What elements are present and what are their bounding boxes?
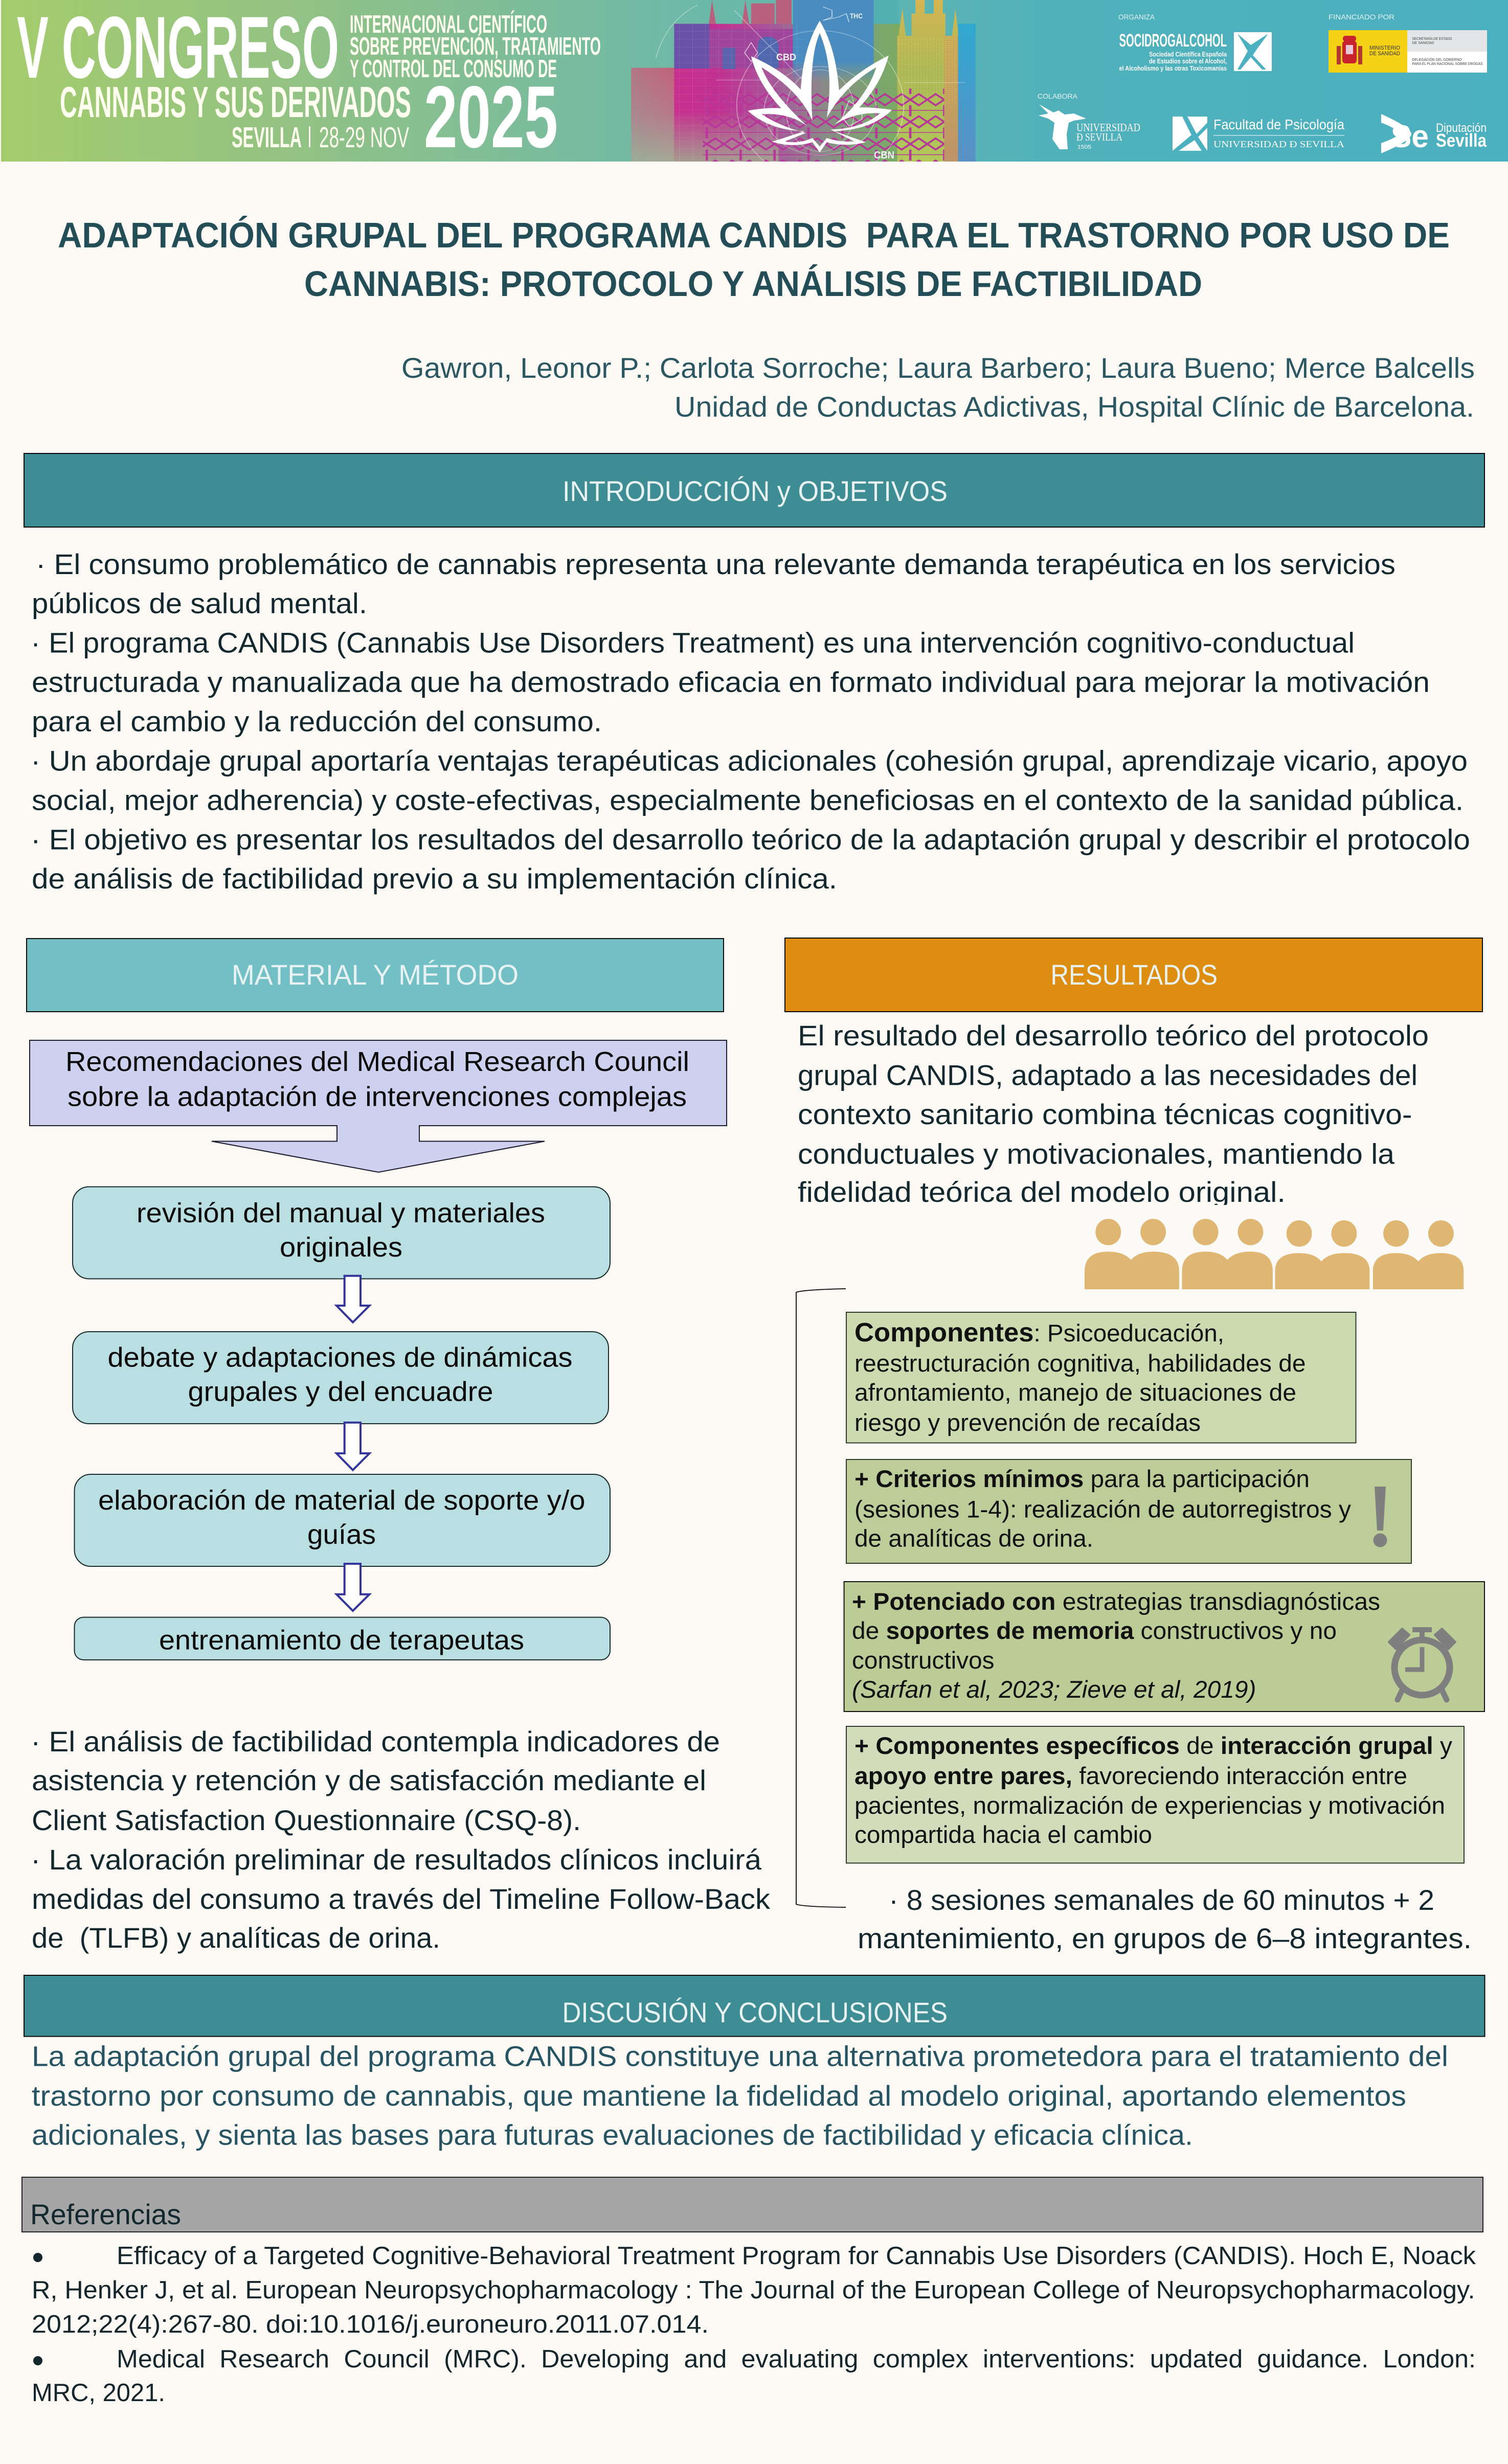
icon: group of people [1082,1205,1468,1292]
text block: resultado: grupal CANDIS, adaptado a las necesidades del [798,1059,1417,1091]
text block: introducción: para el cambio y la reducción del consumo. [32,705,602,737]
text block: factibilidad: asistencia y retención y de satisfacción mediante el [32,1764,706,1796]
text block: resultado: contexto sanitario combina técnicas cognitivo- [798,1098,1412,1130]
title: CANNABIS: PROTOCOLO Y ANÁLISIS DE FACTIBILIDAD [304,264,1202,304]
flowchart step: revisión [73,1187,610,1279]
logo: Diputación de Sevilla: Diputación [1436,121,1487,135]
box: componentes: afrontamiento, manejo de situaciones de [854,1379,1296,1406]
panel: discusión y conclusiones [24,1975,1485,2151]
text block: introducción: · El programa CANDIS (Cannabis Use Disorders Treatment) es una intervención cognitivo-conductual [31,627,1355,658]
heading: material y método [27,939,724,1012]
logo: Ministerio de Sanidad: SECRETARÍA DE ESTADO [1412,36,1452,41]
text block: references [32,2242,1476,2407]
text block: introducción [31,548,1470,895]
box: componentes [846,1312,1356,1443]
box: criterios mínimos: (sesiones 1-4): realización de autorregistros y [854,1496,1351,1522]
banner title text [17,0,601,166]
flowchart box: MRC recommendations [30,1040,727,1172]
logo: Universidad de Sevilla: 1505 [1077,144,1091,150]
heading: resultados: RESULTADOS [1050,959,1218,991]
heading: discusión: DISCUSIÓN Y CONCLUSIONES [562,1996,948,2028]
flowchart step: elaboración: elaboración de material de soporte y/o [98,1485,585,1516]
text block: introducción: · El consumo problemático de cannabis representa una relevante demanda terapéutica en los servicios [36,548,1396,580]
title [58,215,1450,304]
text block: factibilidad: Client Satisfaction Questionnaire (CSQ-8). [32,1804,581,1836]
text block: factibilidad: · El análisis de factibilidad contempla indicadores de [31,1725,720,1758]
box: potenciado con: constructivos [852,1647,994,1674]
banner title text: INTERNACIONAL CIENTÍFICO [350,11,547,38]
heading: introducción [24,453,1484,527]
logo: Universidad de Sevilla: COLABORA [1038,92,1078,100]
authors and affiliation [401,352,1475,423]
banner title text: SOBRE PREVENCIÓN, TRATAMIENTO [350,32,601,60]
box: componentes: riesgo y prevención de recaídas [854,1409,1201,1436]
logo: Socidrogalcohol: ORGANIZA [1118,13,1155,21]
heading: referencias [22,2177,1483,2232]
bracket [796,1289,846,1907]
flowchart step: elaboración [75,1474,610,1566]
box: criterios mínimos: de analíticas de orina. [854,1524,1093,1552]
logo: Ministerio de Sanidad: DE SANIDAD [1412,41,1434,45]
panel: material y método [27,939,771,1954]
text block: introducción: de análisis de factibilidad previo a su implementación clínica. [32,862,837,895]
heading: material y método: MATERIAL Y MÉTODO [232,959,519,991]
text block: resultado: conductuales y motivacionales, mantiendo la [798,1138,1395,1170]
box: componentes específicos: + Componentes específicos de interacción grupal y [854,1732,1453,1759]
banner title text: 2025 [424,68,558,166]
heading: resultados [785,938,1482,1012]
text block: sesiones [858,1884,1472,1954]
logo: Facultad de Psicología: Facultad de Psicología [1213,117,1344,132]
text block: references: Medical Research Council (MRC). Developing and evaluating complex interventions: updated guidance. London: [117,2345,1476,2373]
text block: introducción: estructurada y manualizada que ha demostrado eficacia en formato individual para mejorar la motivación [32,666,1430,698]
text block: references: MRC, 2021. [32,2379,165,2407]
logo: Facultad de Psicología [1173,117,1344,151]
text block: introducción: · El objetivo es presentar los resultados del desarrollo teórico de la adaptación grupal y describir el protocolo [31,823,1470,855]
logo: Socidrogalcohol: el Alcoholismo y las otras Toxicomanías [1119,64,1227,72]
flowchart step: elaboración: guías [307,1519,376,1550]
banner labels: molecules: CBN [874,150,894,161]
text block: references: Efficacy of a Targeted Cognitive-Behavioral Treatment Program for Cannabis Use Disorders (CANDIS). Hoch E, Noack [117,2242,1476,2270]
banner title text: CANNABIS Y SUS DERIVADOS [60,78,411,127]
arrow: step 1 to 2 [336,1276,369,1322]
flowchart step: entrenamiento [75,1617,610,1660]
banner labels: molecules: CBD [776,52,796,62]
box: componentes específicos: apoyo entre pares, favoreciendo interacción entre [854,1762,1407,1789]
panel: introducción y objetivos [24,453,1484,895]
text block: references: R, Henker J, et al. European Neuropsychopharmacology : The Journal of the European College of Neuropsychopharmacology. [32,2276,1475,2304]
logo: Universidad de Sevilla: Ð SEVILLA [1076,131,1123,143]
banner title text: 28-29 NOV [319,121,409,154]
text block: factibilidad: medidas del consumo a través del Timeline Follow-Back [32,1883,771,1915]
text block: conclusiones [32,2040,1448,2151]
text block: introducción: públicos de salud mental. [32,587,367,620]
arrow: step 3 to 4 [336,1564,369,1611]
box: potenciado con: de soportes de memoria constructivos y no [852,1617,1337,1644]
box: componentes específicos [846,1726,1464,1863]
icon: alarm clock [1389,1629,1455,1700]
text block: factibilidad: · La valoración preliminar de resultados clínicos incluirá [31,1843,762,1876]
logo: Ministerio de Sanidad: DELEGACIÓN DEL GOBIERNO [1412,57,1462,62]
panel: resultados [785,938,1484,1954]
logo: Facultad de Psicología: UNIVERSIDAD Ð SEVILLA [1213,139,1344,149]
logo: Socidrogalcohol [1118,13,1272,72]
flowchart step: debate: debate y adaptaciones de dinámicas [107,1342,573,1373]
banner illustration: Seville skyline with cannabis leaf [631,0,976,180]
box: potenciado con [844,1582,1484,1712]
logo: Diputación de Sevilla [1381,114,1487,154]
authors and affiliation: Unidad de Conductas Adictivas, Hospital Clínic de Barcelona. [674,391,1474,423]
flowchart step: debate [73,1332,609,1424]
logo: Ministerio de Sanidad: PARA EL PLAN NACIONAL SOBRE DROGAS [1412,62,1483,66]
icon: exclamation [1374,1487,1387,1547]
banner: congress header [1,0,1508,180]
text block: resultado: fidelidad teórica del modelo original. [798,1176,1286,1208]
box: componentes específicos: pacientes, normalización de experiencias y motivación [854,1792,1445,1819]
logo: Ministerio de Sanidad: MINISTERIO [1369,45,1400,51]
text block: conclusiones: adicionales, y sienta las bases para futuras evaluaciones de factibilidad y eficacia clínica. [32,2118,1193,2151]
banner labels: molecules [776,12,894,161]
logo: Socidrogalcohol: SOCIDROGALCOHOL [1119,31,1227,51]
banner title text: SEVILLA [232,121,302,154]
text block: sesiones: · 8 sesiones semanales de 60 minutos + 2 [889,1884,1434,1916]
logo: Ministerio de Sanidad: FINANCIADO POR [1329,13,1394,21]
flowchart box: MRC recommendations: sobre la adaptación de intervenciones complejas [67,1082,687,1112]
text block: introducción: · Un abordaje grupal aportaría ventajas terapéuticas adicionales (cohesión grupal, aprendizaje vicario, apoyo [31,744,1468,777]
text block: resultado [798,1019,1429,1208]
authors and affiliation: Gawron, Leonor P.; Carlota Sorroche; Laura Barbero; Laura Bueno; Merce Balcells [401,352,1475,384]
flowchart step: revisión: originales [280,1232,402,1263]
banner labels: molecules: THC [850,12,863,20]
text block: references: 2012;22(4):267-80. doi:10.1016/j.euroneuro.2011.07.014. [32,2311,709,2338]
panel: referencias [22,2177,1483,2407]
box: componentes: Componentes: Psicoeducación, [854,1318,1224,1348]
heading: introducción: INTRODUCCIÓN y OBJETIVOS [562,475,948,507]
banner title text: V CONGRESO [17,0,339,97]
text block: factibilidad: de (TLFB) y analíticas de orina. [32,1922,440,1954]
text block: conclusiones: trastorno por consumo de cannabis, que mantiene la fidelidad al modelo original, aportando elementos [32,2080,1406,2112]
flowchart step: revisión: revisión del manual y materiales [137,1198,545,1228]
box: criterios mínimos [846,1459,1411,1563]
arrow: step 2 to 3 [336,1423,369,1470]
box: potenciado con: (Sarfan et al, 2023; Zieve et al, 2019) [852,1676,1256,1703]
title: ADAPTACIÓN GRUPAL DEL PROGRAMA CANDIS PARA EL TRASTORNO POR USO DE [58,215,1450,255]
box: criterios mínimos: + Criterios mínimos para la participación [854,1465,1310,1492]
banner title text: Y CONTROL DEL CONSUMO DE [350,55,557,83]
box: potenciado con: + Potenciado con estrategias transdiagnósticas [852,1588,1380,1615]
logo: Socidrogalcohol: Sociedad Científica Española [1149,51,1227,58]
text block: resultado: El resultado del desarrollo teórico del protocolo [798,1019,1429,1052]
heading: discusión [24,1975,1485,2037]
text block: conclusiones: La adaptación grupal del programa CANDIS constituye una alternativa prometedora para el tratamiento del [32,2040,1448,2072]
box: componentes específicos: compartida hacia el cambio [854,1821,1152,1848]
logo: Universidad de Sevilla [1038,92,1140,150]
flowchart box: MRC recommendations: Recomendaciones del Medical Research Council [65,1046,689,1077]
logo: Diputación de Sevilla: Se [1391,119,1429,154]
logo: Ministerio de Sanidad [1329,13,1487,73]
box: componentes: reestructuración cognitiva, habilidades de [854,1350,1306,1377]
text block: sesiones: mantenimiento, en grupos de 6–8 integrantes. [858,1922,1472,1954]
icon: cannabis leaf [748,21,892,152]
logo: Diputación de Sevilla: Sevilla [1436,130,1487,151]
flowchart step: debate: grupales y del encuadre [188,1377,493,1407]
logo: Ministerio de Sanidad: DE SANIDAD [1369,51,1400,57]
text block: factibilidad [31,1725,771,1954]
logo: Universidad de Sevilla: UNIVERSIDAD [1076,121,1140,134]
heading: referencias: Referencias [30,2198,181,2230]
logo: Socidrogalcohol: de Estudios sobre el Alcohol, [1149,57,1227,65]
flowchart step: entrenamiento: entrenamiento de terapeutas [159,1625,524,1656]
text block: introducción: social, mejor adherencia) y coste-efectivas, especialmente beneficiosas en el contexto de la sanidad pública. [32,784,1464,816]
